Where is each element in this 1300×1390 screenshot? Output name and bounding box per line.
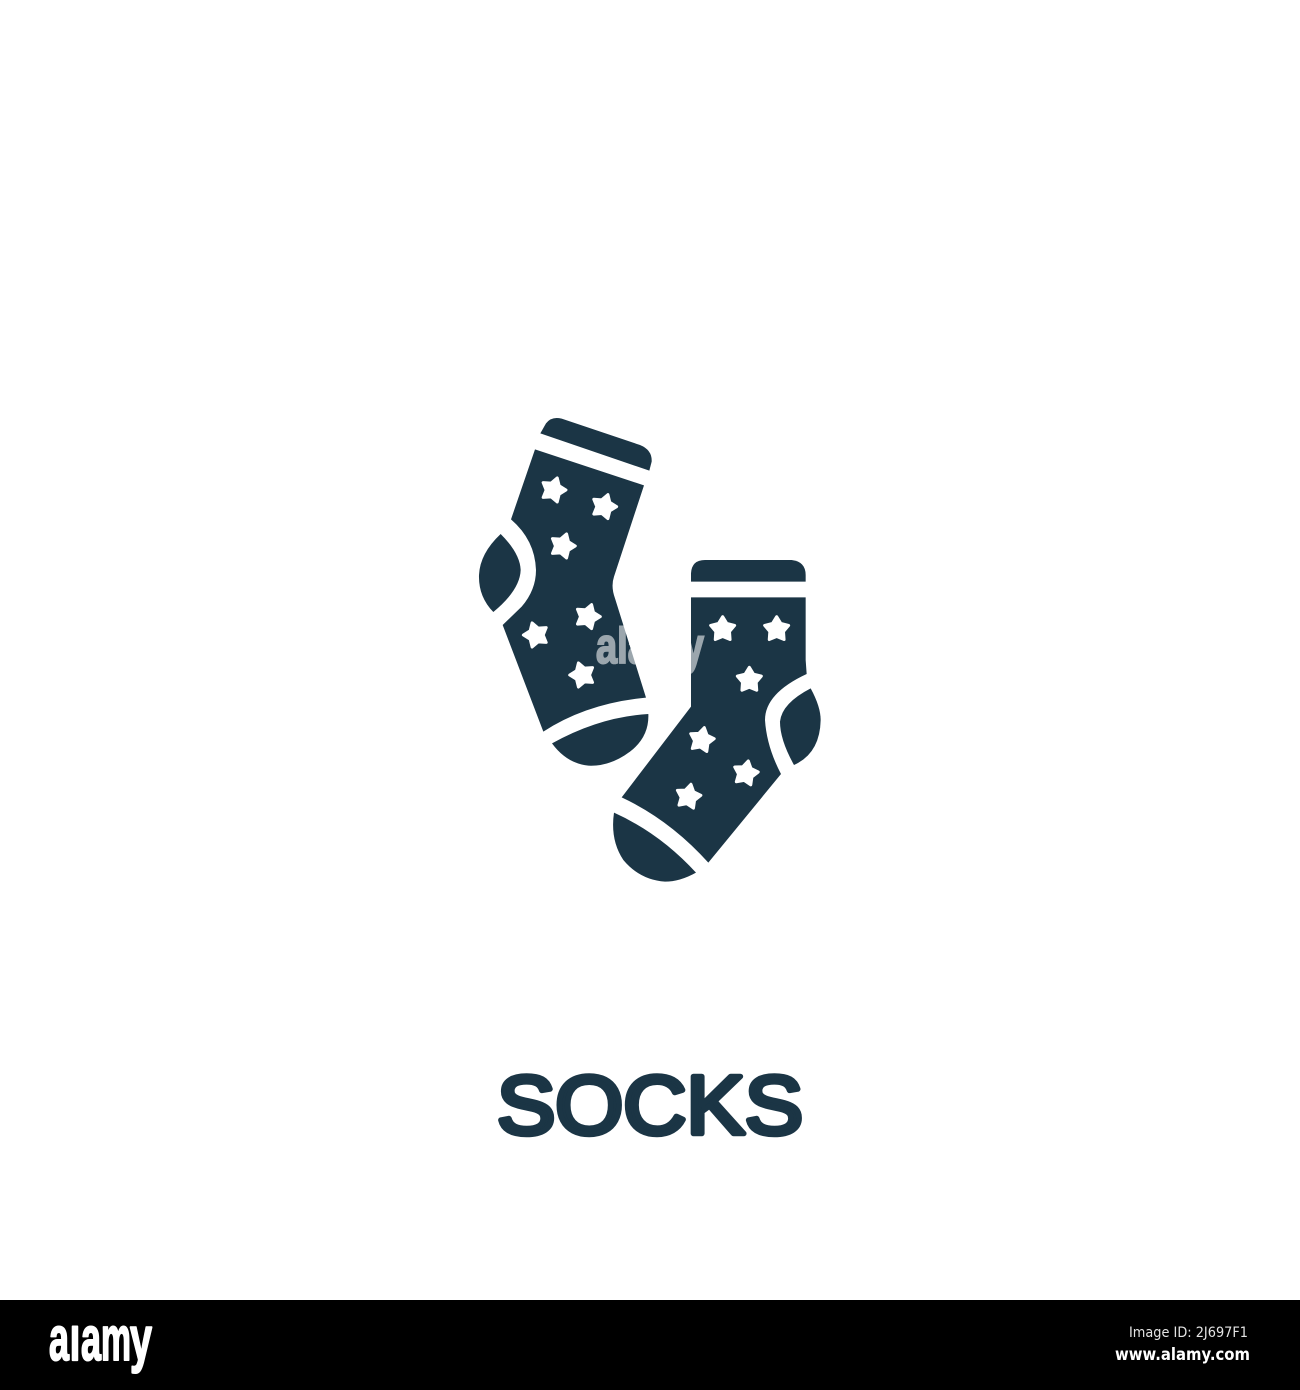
image id: Image ID: 2J697F1 — [1129, 1325, 1248, 1341]
website: www.alamy.com — [1115, 1345, 1250, 1365]
icon: right sock — [613, 560, 821, 882]
icon: left sock — [479, 418, 652, 766]
footer logo: l — [70, 1318, 80, 1370]
footer logo: m — [101, 1305, 131, 1374]
footer bar — [0, 1300, 1300, 1390]
title: SOCKS — [497, 1058, 803, 1152]
footer logo — [49, 1305, 152, 1374]
footer logo: a — [81, 1305, 101, 1374]
watermark: alamy — [596, 618, 704, 674]
icon: pair of socks — [479, 418, 821, 882]
footer logo: a — [49, 1305, 69, 1374]
footer logo: y — [130, 1305, 152, 1374]
